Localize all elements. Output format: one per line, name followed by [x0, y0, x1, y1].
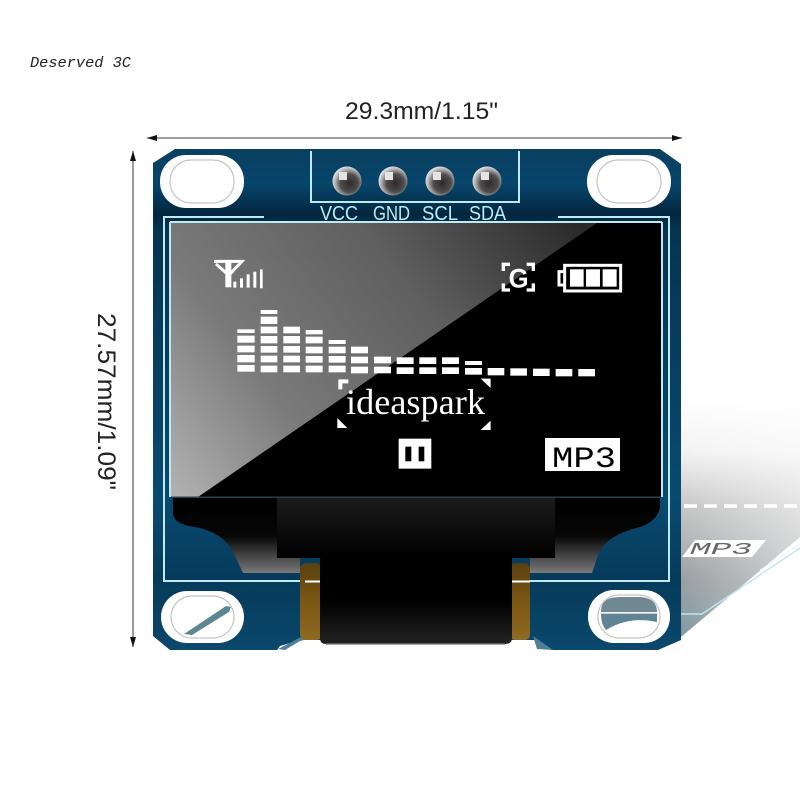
flex center [277, 498, 555, 558]
flex shoulder: left [173, 498, 300, 573]
MP3 badge: MP3 [552, 443, 616, 477]
mounting hole: bottom left [161, 591, 244, 643]
silkscreen frames [164, 151, 669, 581]
pin labels: SCL [422, 203, 458, 225]
icon: pause [399, 439, 431, 469]
flex shoulder: right [530, 498, 660, 573]
height dimension label: 27.57mm/1.09" [92, 313, 120, 490]
mounting hole: top right [587, 155, 671, 208]
pin labels [320, 203, 507, 225]
pin labels: VCC [320, 203, 358, 225]
icon: battery [559, 265, 621, 291]
header pins [332, 166, 502, 196]
width dimension label: 29.3mm/1.15" [345, 98, 498, 125]
MP3 badge [545, 438, 620, 477]
icon: G network: G [509, 263, 529, 293]
reflection of the display on the right [681, 400, 800, 637]
width dimension arrow [147, 137, 682, 139]
flex cable and gold contacts [173, 498, 660, 644]
flex tail [320, 556, 512, 644]
gold contact: right [510, 563, 530, 640]
OLED screen [171, 223, 661, 497]
mounting hole: bottom right [588, 590, 670, 643]
height dimension arrow [132, 151, 134, 647]
circuit board [153, 149, 681, 650]
equalizer bars [237, 310, 595, 376]
pin labels: GND [373, 203, 410, 225]
mounting hole: top left [160, 155, 244, 208]
pin labels: SDA [469, 203, 507, 225]
brand: ideaspark with corner brackets: ideaspark [346, 382, 485, 422]
gold contact: left [300, 563, 322, 640]
icon: signal antenna [214, 261, 263, 288]
watermark: Deserved 3C: Deserved 3C [30, 55, 131, 72]
reflection of the display on the right: MP3 [690, 541, 752, 560]
icon: G network [503, 263, 533, 293]
